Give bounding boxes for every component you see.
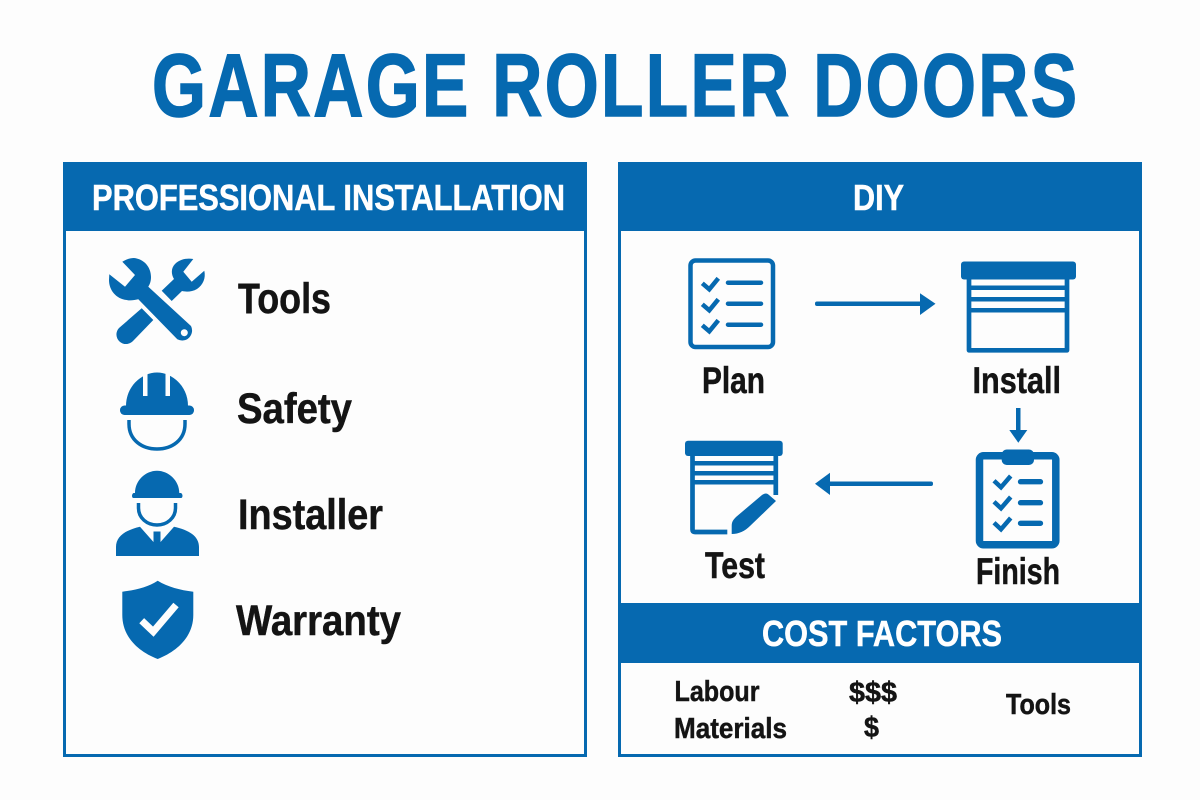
arrow: finish to test — [815, 473, 933, 495]
band: cost factors — [618, 603, 1142, 663]
cost factors table: Tools — [1006, 689, 1071, 721]
panel: professional installation — [63, 162, 587, 756]
label: warranty: Warranty — [236, 597, 401, 645]
icon: installer — [116, 471, 199, 556]
panel header: professional installation — [63, 162, 587, 231]
label: plan: Plan — [702, 360, 765, 401]
label: install: Install — [972, 360, 1061, 401]
band: cost factors: COST FACTORS — [762, 613, 1002, 654]
title: GARAGE ROLLER DOORS — [152, 36, 1077, 135]
label: finish: Finish — [976, 551, 1060, 592]
label: test: Test — [705, 545, 765, 586]
icon: warranty shield — [122, 581, 193, 659]
icon: finish clipboard — [980, 450, 1056, 545]
cost factors table: $$$ — [849, 677, 897, 709]
cost factors table: Materials — [674, 713, 787, 745]
cost factors table — [674, 676, 1071, 745]
icon: tools — [109, 258, 205, 344]
arrow: install to finish — [1009, 408, 1027, 443]
panel: diy — [618, 162, 1142, 756]
arrow: plan to install — [815, 293, 936, 315]
panel header: diy — [618, 162, 1142, 231]
icon: safety helmet — [120, 372, 194, 449]
label: safety: Safety — [237, 385, 352, 433]
label: tools: Tools — [238, 275, 331, 323]
cost factors table: $ — [864, 712, 879, 744]
cost factors table: Labour — [674, 676, 760, 708]
icon: install roller door — [961, 262, 1076, 350]
icon: test door with pencil — [685, 441, 783, 534]
panel header: diy: DIY — [853, 177, 904, 218]
panel header: professional installation: PROFESSIONAL INSTALLATION — [92, 177, 565, 218]
label: installer: Installer — [238, 491, 383, 539]
icon: plan checklist — [690, 260, 773, 347]
